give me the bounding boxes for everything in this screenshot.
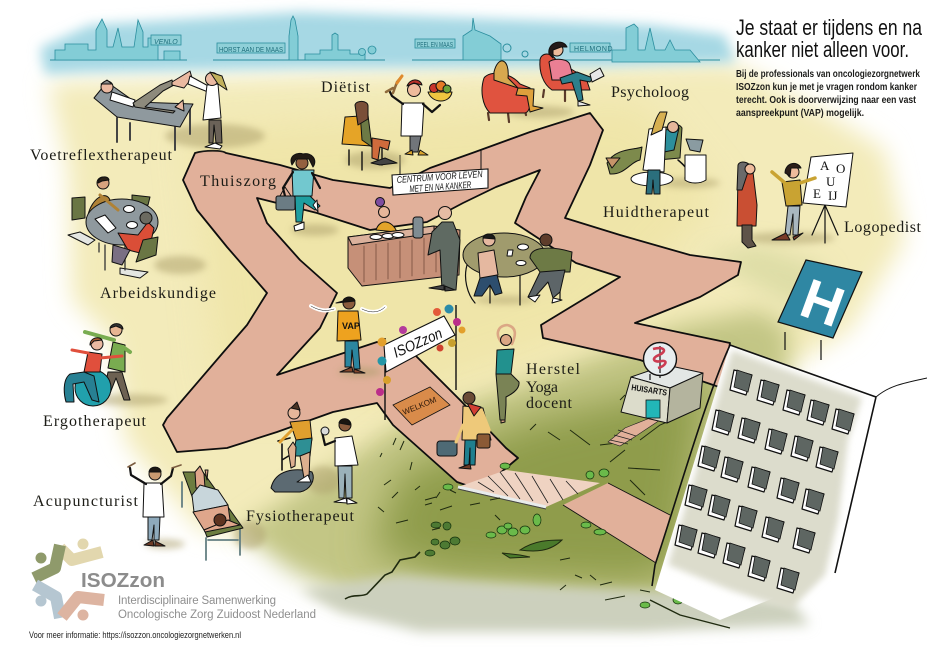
- ground: yellow sand: [48, 62, 905, 560]
- welcome mat: WELKOM: [401, 395, 438, 417]
- labels: professions: Ergotherapeut: [43, 413, 147, 430]
- person: fysiotherapeut with client on bike: [271, 402, 358, 504]
- banner: ISOZzon with flower arch: ISOZzon: [391, 325, 445, 362]
- skyline: towns: HORST AAN DE MAAS: [219, 45, 283, 54]
- road network: [163, 113, 741, 563]
- intro text: aanspreekpunt (VAP) mogelijk.: [736, 107, 864, 119]
- logo tagline: [118, 595, 316, 621]
- person: yoga teacher: [496, 325, 519, 423]
- skyline: towns: VENLO: [154, 39, 178, 46]
- footer: more information: Voor meer informatie: https://isozzon.oncologiezorgnetwerken.nl: [29, 630, 241, 641]
- labels: professions: Fysiotherapeut: [246, 508, 355, 525]
- huisarts building: [608, 342, 703, 446]
- grass details: [345, 395, 730, 628]
- person: visitor with bags: [437, 392, 491, 469]
- person: logopedist with board: A: [820, 158, 830, 173]
- title: [736, 15, 923, 62]
- person: logopedist with board: E: [813, 186, 821, 201]
- person: logopedist with board: U: [826, 174, 836, 189]
- skyline wash: [40, 12, 735, 74]
- person: VAP with vest: VAP: [342, 321, 360, 331]
- person: huidtherapeut and patient: [606, 112, 720, 194]
- person: dietist with patient: [342, 76, 452, 170]
- logo tagline: Interdisciplinaire Samenwerking: [118, 595, 276, 607]
- logo mark: [34, 538, 104, 620]
- person: nurse thuiszorg: [276, 153, 339, 236]
- person: VAP with vest: [311, 297, 385, 377]
- welcome mat: [393, 387, 450, 425]
- sign: centrum voor leven: [392, 150, 488, 196]
- labels: professions: Acupuncturist: [33, 493, 139, 510]
- group: arbeidskundige at table: [68, 177, 206, 278]
- logo wordmark: ISOZzon: [81, 570, 165, 592]
- banner: ISOZzon with flower arch: [376, 304, 466, 420]
- person: logopedist with board: [737, 153, 853, 248]
- labels: professions: Thuiszorg: [200, 173, 276, 190]
- skyline: towns: PEEL EN MAAS: [417, 42, 453, 49]
- labels: professions: Diëtist: [321, 79, 371, 96]
- labels: professions: Herstel: [526, 361, 581, 378]
- labels: professions: Yoga: [526, 379, 558, 396]
- windows: [675, 370, 854, 593]
- logo: ISOZzon: [34, 538, 316, 621]
- huisarts building: HUISARTS: [631, 382, 668, 398]
- group: ergotherapeut and client on ball: [64, 324, 168, 406]
- icon: hospital H sign: [778, 260, 862, 360]
- sign: centrum voor leven: MET EN NA KANKER: [409, 180, 472, 195]
- skyline: towns: [50, 16, 720, 62]
- person: psycholoog and client: [482, 42, 604, 122]
- labels: professions: Logopedist: [844, 219, 922, 236]
- person: logopedist with board: IJ: [828, 188, 837, 203]
- person: patient on bed and voetreflex therapist: [94, 71, 265, 150]
- desk with host and man: [348, 198, 460, 291]
- ground: green hill: [240, 245, 830, 632]
- icon: medical symbol: [644, 342, 676, 376]
- person: logopedist with board: O: [836, 161, 845, 176]
- logo tagline: Oncologische Zorg Zuidoost Nederland: [118, 609, 316, 621]
- labels: professions: Psycholoog: [611, 84, 689, 101]
- person: acupuncturist and patient: [128, 463, 266, 560]
- intro text: [736, 68, 920, 119]
- building: hospital: [652, 345, 927, 620]
- skyline: towns: HELMOND: [574, 46, 613, 53]
- sign: centrum voor leven: CENTRUM VOOR LEVEN: [396, 169, 483, 186]
- labels: professions: docent: [526, 395, 573, 412]
- cafe table with two people: [463, 233, 572, 305]
- labels: professions: Arbeidskundige: [100, 285, 216, 302]
- labels: professions: Voetreflextherapeut: [30, 147, 173, 164]
- labels: professions: [30, 79, 922, 525]
- labels: professions: Huidtherapeut: [603, 204, 710, 221]
- icon: hospital H sign: H: [793, 266, 852, 339]
